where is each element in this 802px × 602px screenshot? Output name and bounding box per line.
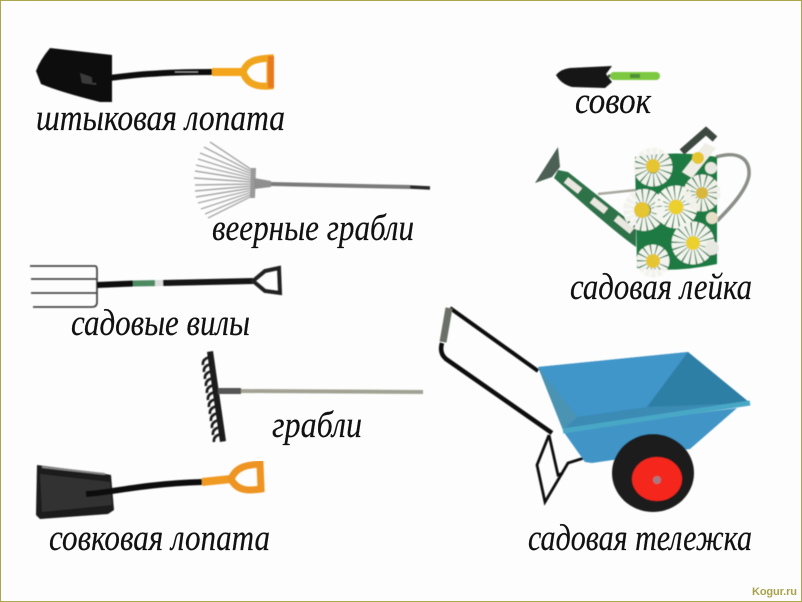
icon: watering can	[535, 131, 749, 272]
label: rake: грабли	[272, 405, 362, 446]
label: spade shovel: штыковая лопата	[36, 98, 285, 139]
label: fan rake: веерные грабли	[212, 208, 414, 249]
watermark: Kogur.ru	[752, 586, 797, 598]
daisies	[630, 154, 719, 272]
label: garden cart: садовая тележка	[528, 518, 752, 559]
icon: garden cart	[441, 308, 750, 512]
cart tray	[563, 408, 737, 463]
label: watering can: садовая лейка	[570, 267, 752, 308]
label: garden fork: садовые вилы	[71, 303, 250, 344]
icon: fan rake	[194, 142, 430, 218]
icon: scoop shovel	[36, 464, 261, 519]
cart legs	[537, 435, 584, 502]
watering can lid	[682, 143, 716, 178]
icon: garden fork	[30, 266, 280, 307]
icon: trowel	[556, 66, 656, 88]
label: scoop shovel: совковая лопата	[49, 518, 270, 559]
cart wheel	[612, 434, 694, 512]
label: trowel: совок	[575, 81, 652, 122]
watering can spout and rose	[554, 170, 636, 247]
watering can handles	[598, 131, 749, 221]
watering can body	[635, 154, 717, 270]
icon: spade shovel	[36, 48, 274, 102]
cart handle	[441, 308, 552, 433]
icon: rake	[203, 351, 423, 442]
